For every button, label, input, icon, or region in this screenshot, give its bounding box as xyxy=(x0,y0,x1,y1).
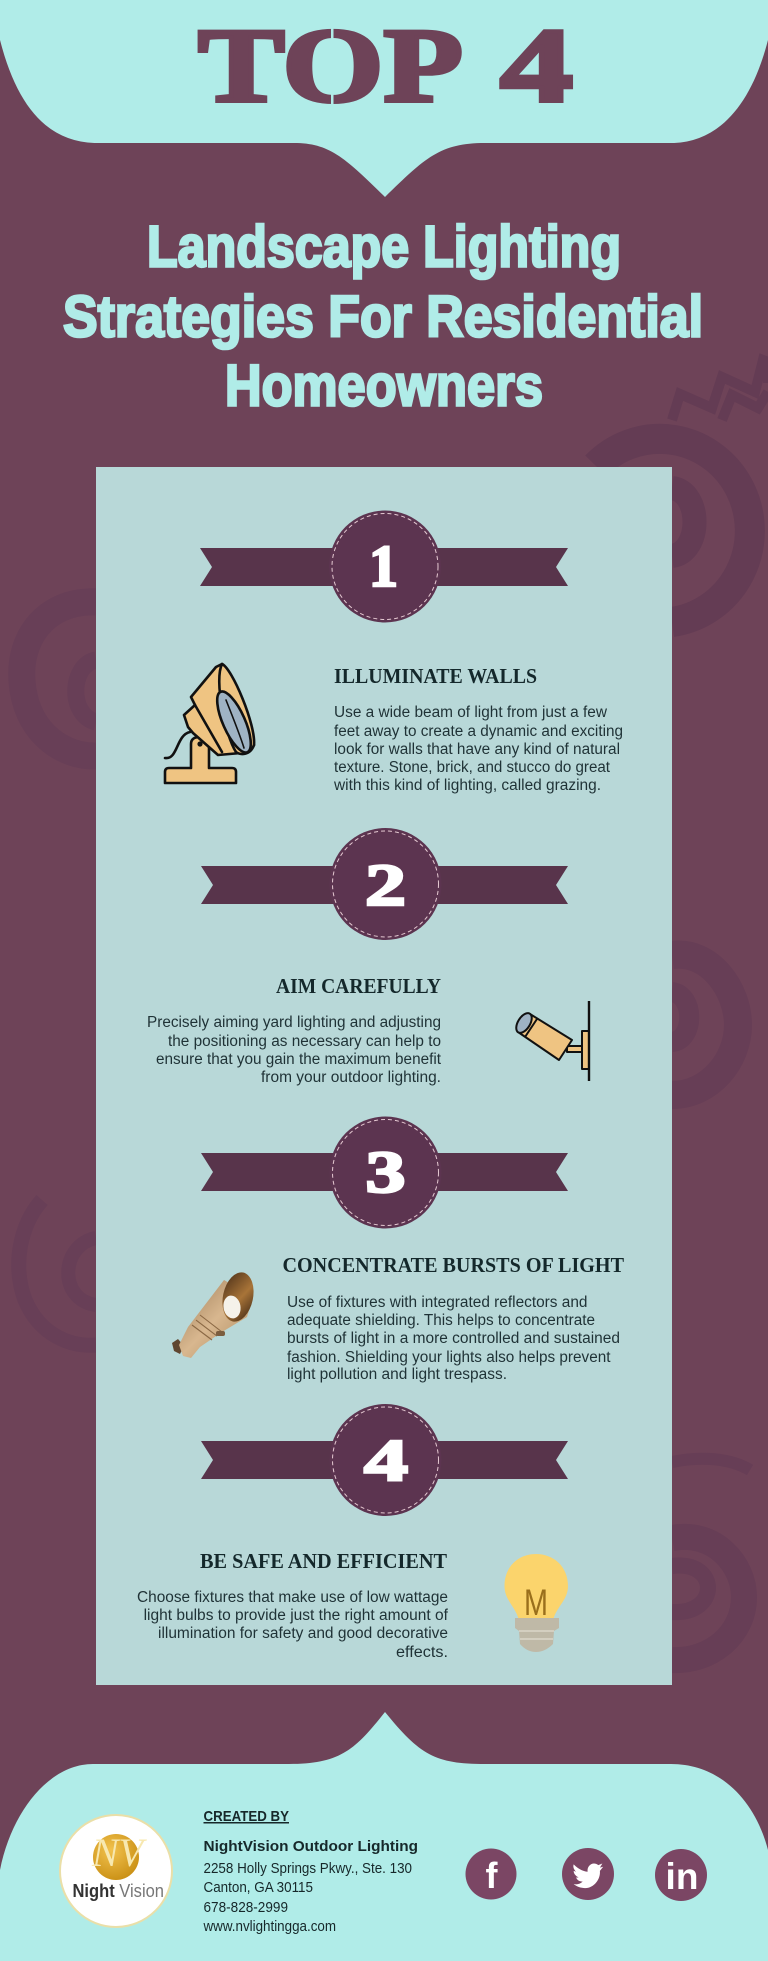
text block: be safe and efficient: illumination for safety and good decorative xyxy=(158,1625,448,1642)
title: 4 xyxy=(500,7,573,124)
decorative zigzag xyxy=(672,360,768,420)
text block: concentrate bursts of light: Use of fixtures with integrated reflectors and xyxy=(287,1294,588,1311)
title xyxy=(198,7,573,124)
section 4 number ribbon xyxy=(201,1404,568,1516)
icon: wall grazing spotlight xyxy=(165,664,257,783)
created by block: Canton, GA 30115 xyxy=(204,1879,313,1896)
panel: main content xyxy=(96,467,672,1685)
icon: linkedin: in xyxy=(666,1856,698,1897)
created by block: CREATED BY xyxy=(204,1808,289,1825)
text block: illuminate walls: Use a wide beam of light from just a few xyxy=(334,704,608,721)
logo: NightVision xyxy=(60,1815,172,1927)
icon: brass bullet light xyxy=(172,1269,258,1358)
title: TOP xyxy=(198,7,463,124)
text block: be safe and efficient: effects. xyxy=(396,1644,448,1661)
created by block: 2258 Holly Springs Pkwy., Ste. 130 xyxy=(204,1860,412,1877)
logo: NightVision: Night Vision xyxy=(72,1881,164,1901)
heading: illuminate walls: ILLUMINATE WALLS xyxy=(334,664,537,688)
icon: light bulb xyxy=(504,1554,568,1652)
heading: be safe and efficient: BE SAFE AND EFFICIENT xyxy=(200,1549,448,1573)
icon: wall mounted spotlight xyxy=(513,1001,589,1081)
text block: concentrate bursts of light: light pollution and light trespass. xyxy=(287,1366,507,1383)
text block: illuminate walls xyxy=(333,704,623,794)
text block: aim carefully: the positioning as necessary can help to xyxy=(168,1033,441,1050)
text block: be safe and efficient: Choose fixtures that make use of low wattage xyxy=(137,1589,448,1606)
text block: be safe and efficient: light bulbs to provide just the right amount of xyxy=(144,1607,449,1624)
text block: be safe and efficient xyxy=(137,1589,449,1661)
section 2 number ribbon xyxy=(201,828,568,940)
icon: light bulb: M xyxy=(524,1582,548,1623)
section 2 number ribbon: 2 xyxy=(365,852,406,918)
heading: aim carefully: AIM CAREFULLY xyxy=(276,974,441,998)
section 1 number ribbon xyxy=(200,510,568,622)
text block: concentrate bursts of light: bursts of light in a more controlled and sustained xyxy=(287,1330,620,1347)
text block: aim carefully: from your outdoor lighting. xyxy=(261,1069,441,1086)
logo: NightVision: NV xyxy=(91,1830,148,1875)
text block: concentrate bursts of light xyxy=(287,1294,620,1383)
subtitle: Strategies For Residential xyxy=(63,284,703,350)
text block: illuminate walls: texture. Stone, brick, and stucco do great xyxy=(334,759,611,776)
section 1 number ribbon: 1 xyxy=(369,533,398,599)
subtitle: Landscape Lighting xyxy=(147,214,621,280)
text block: concentrate bursts of light: adequate shielding. This helps to concentrate xyxy=(287,1312,595,1329)
heading: concentrate bursts of light: CONCENTRATE BURSTS OF LIGHT xyxy=(282,1253,625,1277)
created by block: NightVision Outdoor Lighting xyxy=(204,1838,418,1855)
created by block xyxy=(203,1808,418,1935)
text block: aim carefully xyxy=(147,1014,442,1086)
created by block: www.nvlightingga.com xyxy=(203,1918,336,1935)
text block: illuminate walls: look for walls that have any kind of natural xyxy=(334,741,620,758)
icon: twitter xyxy=(562,1848,614,1900)
icon: facebook: f xyxy=(486,1855,498,1896)
subtitle xyxy=(63,214,703,418)
icon: facebook xyxy=(466,1848,516,1900)
text block: concentrate bursts of light: fashion. Shielding your lights also helps prevent xyxy=(287,1349,611,1366)
text block: aim carefully: Precisely aiming yard lighting and adjusting xyxy=(147,1014,441,1031)
top banner shape xyxy=(0,0,768,197)
icon: linkedin xyxy=(655,1849,707,1901)
section 3 number ribbon xyxy=(201,1116,568,1228)
footer banner shape xyxy=(0,1712,768,1961)
subtitle: Homeowners xyxy=(225,354,543,418)
decorative spirals xyxy=(19,439,750,1660)
text block: aim carefully: ensure that you gain the maximum benefit xyxy=(156,1051,442,1068)
text block: illuminate walls: with this kind of lighting, called grazing. xyxy=(333,777,601,794)
created by block: 678-828-2999 xyxy=(204,1899,288,1916)
section 3 number ribbon: 3 xyxy=(366,1139,406,1205)
section 4 number ribbon: 4 xyxy=(364,1427,408,1493)
text block: illuminate walls: feet away to create a dynamic and exciting xyxy=(334,723,623,740)
